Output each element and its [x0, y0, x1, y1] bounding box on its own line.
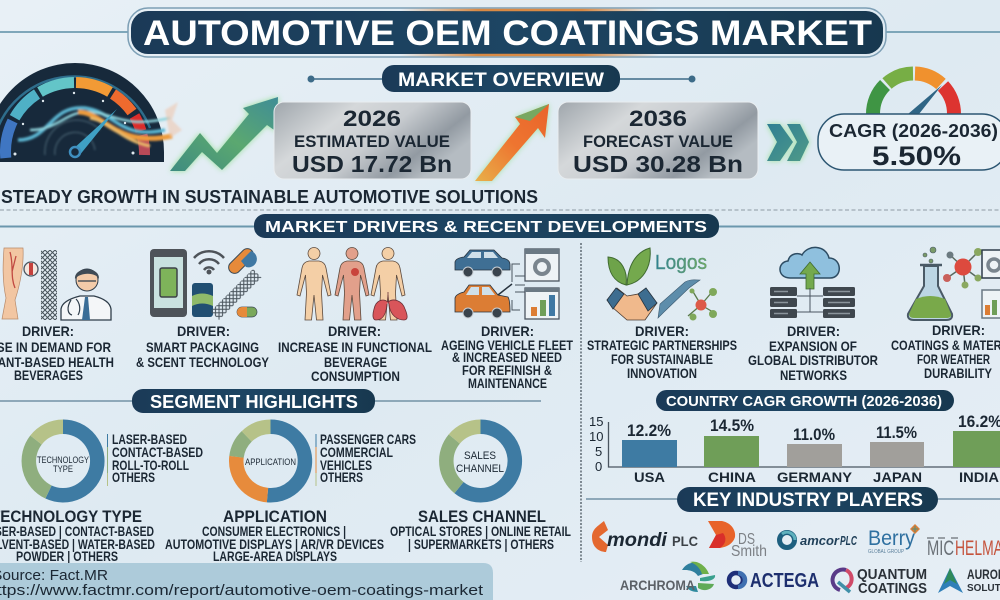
segment text: POWDER | OTHERS: [16, 549, 118, 564]
text: driver 4: MAINTENANCE: [468, 375, 547, 391]
heading: market drivers: [0, 214, 1000, 238]
legend: [316, 431, 416, 486]
text: driver 3: BEVERAGE: [324, 354, 387, 370]
bar: Japan: [870, 423, 924, 485]
text: driver 4: AGEING VEHICLE FLEET: [441, 337, 573, 353]
source box: [0, 563, 493, 600]
bar: Germany: GERMANY: [777, 469, 853, 485]
legend: OTHERS: [112, 469, 155, 485]
text: driver 4: [441, 323, 573, 391]
logo: Amcor: amcor: [800, 533, 840, 548]
donut label: [456, 450, 504, 475]
text: driver 6: DRIVER:: [787, 323, 840, 339]
bar: China: CHINA: [708, 469, 756, 485]
logo: Actega: ACTEGA: [750, 570, 819, 592]
legend: CONTACT-BASED: [112, 444, 203, 460]
legend: VEHICLES: [320, 457, 372, 473]
heading: market overview: MARKET OVERVIEW: [398, 70, 604, 91]
donut label: APPLICATION: [245, 457, 296, 467]
text: driver 3: [278, 323, 432, 384]
text: driver 5: [587, 323, 737, 381]
logo: Michelman: [927, 537, 1000, 560]
icon: flask and molecule: [908, 247, 1000, 320]
bar: Germany: 11.0%: [793, 425, 835, 444]
text: driver 7: DRIVER:: [932, 322, 985, 338]
icon: cloud and servers: [770, 247, 855, 318]
logo: Actega: [729, 570, 819, 592]
panel: CAGR callout: CAGR (2026-2036): [829, 121, 998, 141]
logo: Quantum Coatings: [833, 566, 927, 597]
bar: USA: 12.2%: [627, 421, 671, 440]
segment text: [390, 507, 571, 552]
bar: India: [953, 412, 1000, 485]
legend: ROLL-TO-ROLL: [112, 457, 189, 473]
legend: [108, 431, 203, 486]
logo: Amcor: PLC: [840, 533, 857, 548]
panel: 2026 estimated value: 2026: [343, 106, 401, 131]
text: driver 5: INNOVATION: [627, 365, 697, 381]
segment text: | SUPERMARKETS | OTHERS: [408, 537, 554, 552]
text: driver 2: DRIVER:: [177, 323, 230, 339]
panel: driver 2: [136, 246, 270, 370]
panel: 2026 estimated value: [274, 102, 471, 179]
panel: 2036 forecast value: 2036: [629, 106, 687, 131]
logo: DS Smith: Smith: [731, 543, 767, 560]
panel: driver 4: [441, 249, 573, 391]
icon: human bodies and lungs: [297, 248, 407, 320]
legend: OTHERS: [320, 469, 363, 485]
panel: driver 6: [748, 247, 878, 383]
panel: driver 5: [587, 248, 737, 381]
logo: Mondi: [592, 521, 698, 552]
title banner: [0, 8, 1000, 57]
icon: leg, stent and doctor: [2, 248, 111, 320]
bar chart: country CAGR: [589, 412, 1000, 485]
segment text: [0, 507, 155, 564]
panel: sales channel segment: [390, 427, 571, 552]
logo: Quantum Coatings: COATINGS: [858, 580, 927, 597]
logo: Aurora Solutions: [938, 566, 1000, 594]
donut label: TYPE: [53, 464, 73, 474]
bar: Japan: 11.5%: [876, 423, 917, 442]
segment text: [165, 507, 384, 564]
heading: market overview: [308, 65, 696, 92]
arrow: orange growth: [475, 104, 549, 181]
segment text: OPTICAL STORES | ONLINE RETAIL: [390, 524, 571, 539]
panel: 2036 forecast value: FORECAST VALUE: [583, 132, 733, 151]
donut label: SALES: [464, 450, 496, 462]
logo: DS Smith: DS: [738, 531, 755, 548]
panel: 2026 estimated value: USD 17.72 Bn: [292, 151, 452, 177]
bar: China: [704, 416, 759, 485]
logo: Archroma: [620, 562, 715, 593]
bar chart: country CAGR: 0: [595, 459, 602, 474]
panel: technology type segment: [0, 427, 203, 564]
panel: driver 7: [891, 247, 1000, 381]
donut label: TECHNOLOGY: [37, 455, 89, 465]
heading: country CAGR: COUNTRY CAGR GROWTH (2026-2036): [666, 393, 942, 410]
logo: Michelman: MIC: [927, 537, 954, 560]
bar: USA: USA: [634, 469, 665, 485]
text: driver 5: DRIVER:: [635, 323, 689, 339]
text: driver 6: EXPANSION OF: [769, 338, 857, 354]
logo: Amcor: [780, 532, 857, 548]
heading: market drivers: MARKET DRIVERS & RECENT DEVELOPMENTS: [265, 219, 707, 236]
text: driver 6: GLOBAL DISTRIBUTOR: [748, 352, 878, 368]
text: driver 6: NETWORKS: [780, 367, 847, 383]
text: driver 4: DRIVER:: [481, 323, 534, 339]
panel: 2036 forecast value: USD 30.28 Bn: [573, 151, 743, 177]
logo: Mondi: mondi: [607, 530, 668, 551]
panel: application segment: [165, 427, 416, 564]
heading: key industry players: [586, 487, 1000, 512]
donut label: CHANNEL: [456, 463, 504, 475]
text: driver 4: & INCREASED NEED: [452, 349, 562, 365]
bar chart: country CAGR: 10: [589, 429, 603, 444]
text: driver 3: CONSUMPTION: [311, 368, 400, 384]
legend: LASER-BASED: [112, 431, 187, 447]
logo: DS Smith: [708, 521, 767, 560]
segment text: SALES CHANNEL: [418, 507, 546, 526]
heading: key industry players: KEY INDUSTRY PLAYERS: [693, 490, 923, 511]
icon: double chevron: [767, 124, 809, 161]
panel: CAGR callout: [818, 114, 1000, 171]
panel: 2036 forecast value: [558, 102, 758, 179]
segment text: AUTOMOTIVE DISPLAYS | AR/VR DEVICES: [165, 537, 384, 552]
heading: segment highlights: SEGMENT HIGHLIGHTS: [150, 392, 358, 412]
text: driver 3: INCREASE IN FUNCTIONAL: [278, 339, 432, 355]
title banner: AUTOMOTIVE OEM COATINGS MARKET: [143, 14, 872, 53]
donut chart: sales channel: [446, 427, 515, 495]
panel: 2026 estimated value: ESTIMATED VALUE: [294, 132, 450, 151]
subtitle: STEADY GROWTH IN SUSTAINABLE AUTOMOTIVE SOLUTIONS: [1, 187, 538, 207]
text: driver 6: [748, 323, 878, 383]
bar: Germany: [777, 425, 853, 485]
bar: India: INDIA: [959, 469, 999, 485]
logo: Mondi: PLC: [672, 533, 698, 549]
icon: smart packaging: [150, 246, 261, 320]
heading: segment highlights: [0, 389, 541, 413]
legend: COMMERCIAL: [320, 444, 393, 460]
bar: USA: [622, 421, 677, 485]
bar: China: 14.5%: [710, 416, 754, 435]
bar chart: country CAGR: 15: [589, 414, 603, 429]
text: driver 4: FOR REFINISH &: [462, 362, 552, 378]
icon: leaves and handshake: Logos: [655, 252, 707, 274]
text: driver 3: DRIVER:: [328, 323, 381, 339]
logo: Quantum Coatings: QUANTUM: [857, 566, 927, 583]
text: driver 1: BEVERAGES: [14, 367, 83, 383]
icon: cars and service panels: [455, 249, 559, 319]
panel: CAGR callout: 5.50%: [872, 141, 961, 171]
logo: Archroma: ARCHROMA: [620, 577, 695, 593]
legend: PASSENGER CARS: [320, 431, 416, 447]
donut label: [37, 455, 89, 474]
text: driver 5: FOR SUSTAINABLE: [611, 351, 713, 367]
bar: Japan: JAPAN: [873, 469, 922, 485]
icon: CAGR gauge: [873, 74, 954, 114]
icon: speedometer gauge: [0, 63, 182, 162]
segment text: CONSUMER ELECTRONICS |: [202, 524, 346, 539]
arrow: green growth: [170, 97, 278, 171]
icon: leaves and handshake: [607, 248, 717, 320]
text: driver 5: STRATEGIC PARTNERSHIPS: [587, 337, 737, 353]
text: driver 1: DRIVER:: [22, 323, 74, 339]
donut chart: application: [236, 427, 305, 495]
panel: driver 1: [0, 248, 114, 383]
bar chart: country CAGR: 5: [595, 444, 602, 459]
logos: industry players: [592, 521, 1000, 597]
text: driver 2: SMART PACKAGING: [146, 339, 259, 355]
text: driver 2: [136, 323, 270, 370]
segment text: LARGE-AREA DISPLAYS: [213, 549, 337, 564]
logo: Berry: Berry: [868, 527, 915, 550]
segment text: APPLICATION: [223, 507, 327, 526]
text: driver 2: & SCENT TECHNOLOGY: [136, 354, 270, 370]
logo: Berry: GLOBAL GROUP: [868, 549, 905, 555]
donut chart: technology type: [29, 427, 97, 495]
panel: driver 3: [278, 248, 432, 384]
text: driver 1: [0, 323, 114, 383]
text: driver 7: [891, 322, 1000, 381]
